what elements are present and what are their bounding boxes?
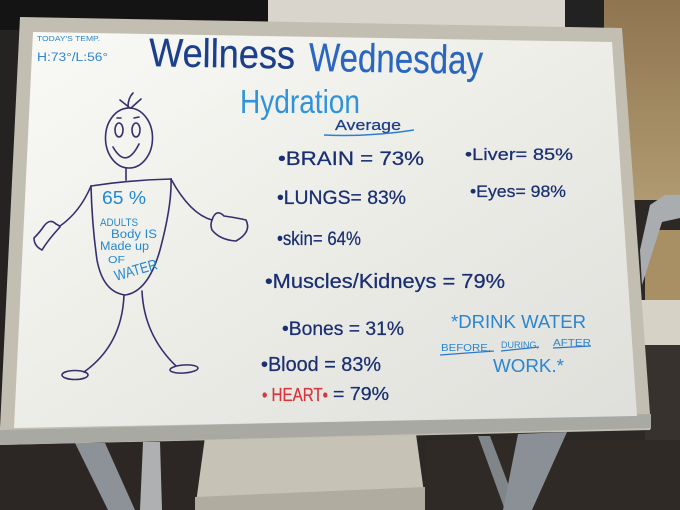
fact: eyes: •Eyes= 98%: [470, 182, 566, 201]
body text: 65 %: [102, 188, 146, 208]
fact: skin: •skin= 64%: [277, 229, 361, 250]
fact: liver: •Liver= 85%: [465, 145, 573, 164]
body text: WATER: [112, 256, 160, 285]
temperature note: [37, 34, 108, 64]
fact: bones: •Bones = 31%: [282, 319, 404, 340]
board writing surface: [14, 32, 637, 428]
reminder note: DURING,: [501, 340, 539, 351]
reminder note: *DRINK WATER: [451, 312, 586, 332]
body text: ADULTS: [100, 217, 138, 229]
reminder note: [440, 312, 591, 376]
average label: [324, 117, 414, 135]
fact: blood: •Blood = 83%: [261, 354, 381, 376]
title: Wellness: [149, 31, 295, 78]
fact: heart: • HEART•: [262, 385, 328, 405]
reminder note: BEFORE,: [441, 342, 491, 354]
temperature note: H:73°/L:56°: [37, 52, 108, 64]
body text: OF: [108, 254, 125, 266]
subtitle: Hydration: [240, 83, 360, 120]
title: [149, 31, 483, 83]
title: Wednesday: [309, 36, 483, 83]
stick figure: [34, 93, 248, 380]
chair seat: [195, 434, 425, 510]
fact: lungs: •LUNGS= 83%: [277, 188, 406, 209]
facts list: [261, 145, 573, 405]
reminder note: AFTER: [553, 337, 591, 349]
fact: muscles and kidneys: •Muscles/Kidneys = 79%: [265, 271, 505, 293]
fact: heart: = 79%: [333, 384, 389, 404]
reminder note: WORK.*: [493, 356, 564, 376]
fact: heart: [262, 384, 389, 405]
average label: Average: [335, 117, 401, 134]
temperature note: TODAY'S TEMP.: [37, 34, 100, 43]
fact: brain: •BRAIN = 73%: [278, 149, 424, 170]
body text: Made up: [100, 241, 149, 253]
body text: [100, 188, 160, 285]
stand and legs: [75, 195, 680, 510]
body text: Body IS: [111, 229, 157, 241]
